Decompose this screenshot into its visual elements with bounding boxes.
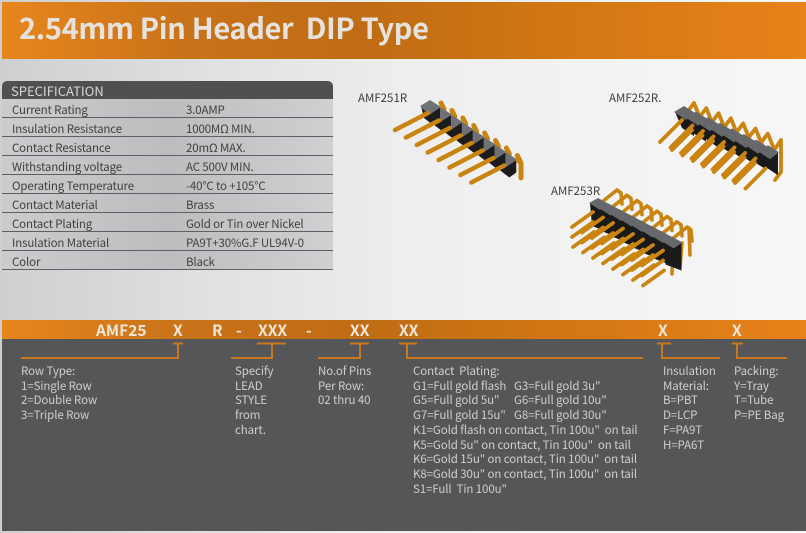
- code: insulation X: X: [658, 319, 668, 341]
- spec row: withstanding voltage: Withstanding voltage: [12, 159, 122, 175]
- label: AMF251R: AMF251R: [358, 90, 407, 106]
- code: R: R: [212, 319, 223, 341]
- spec row: contact resistance: 20mΩ MAX.: [186, 140, 246, 156]
- text: row type: Row Type: 1=Single Row 2=Double Row 3=Triple Row: [21, 363, 97, 423]
- spec row: current rating: Current Rating: [12, 102, 88, 118]
- code: dash: -: [306, 319, 312, 341]
- code: plating XX: XX: [399, 319, 418, 341]
- code: pins XX: XX: [350, 319, 369, 341]
- spec row: insulation material: [2, 232, 333, 251]
- spec row: color: [2, 251, 333, 270]
- spec row: insulation resistance: [2, 118, 333, 137]
- title: 2.54mm Pin Header DIP Type: [19, 6, 429, 48]
- table heading: [2, 81, 333, 99]
- spec row: contact resistance: Contact Resistance: [12, 140, 111, 156]
- bracket connectors: [21, 342, 787, 359]
- spec row: contact material: Brass: [186, 197, 214, 213]
- code: packing X: X: [732, 319, 742, 341]
- ordering code bar: [2, 320, 806, 339]
- spec row: insulation resistance: Insulation Resistance: [12, 121, 122, 137]
- spec row: current rating: 3.0AMP: [186, 102, 225, 118]
- table heading: SPECIFICATION: [11, 81, 104, 100]
- text: contact plating: G8=Full gold 30u": [514, 407, 607, 423]
- spec row: withstanding voltage: AC 500V MIN.: [186, 159, 254, 175]
- spec row: operating temperature: -40°C to +105°C: [186, 178, 266, 194]
- code: row type X: X: [173, 319, 183, 341]
- text: contact plating: G3=Full gold 3u": [514, 378, 600, 394]
- spec row: contact material: Contact Material: [12, 197, 98, 213]
- spec row: contact plating: [2, 213, 333, 232]
- code: dash: -: [236, 319, 242, 341]
- panel: ordering information: [2, 339, 806, 531]
- title banner: [2, 2, 806, 59]
- spec row: contact material: [2, 194, 333, 213]
- spec row: contact resistance: [2, 137, 333, 156]
- connector: AMF252R double row: [660, 103, 781, 188]
- spec row: insulation resistance: 1000MΩ MIN.: [186, 121, 255, 137]
- label: AMF252R: AMF252R.: [609, 90, 661, 106]
- spec row: current rating: [2, 99, 333, 118]
- connector: AMF251R single row: [395, 100, 521, 182]
- code: XXX: XXX: [258, 319, 287, 341]
- code: AMF25: AMF25: [96, 319, 147, 341]
- spec row: operating temperature: [2, 175, 333, 194]
- spec row: insulation material: PA9T+30%G.F UL94V-0: [186, 235, 304, 251]
- spec row: contact plating: Contact Plating: [12, 216, 92, 232]
- text: lead style: Specify LEAD STYLE from chart.: [235, 363, 273, 438]
- text: insulation material: Insulation Material: B=PBT D=LCP F=PA9T H=PA6T: [663, 363, 716, 453]
- connector: AMF253R triple row: [572, 190, 692, 286]
- spec row: color: Color: [12, 254, 40, 270]
- spec row: color: Black: [186, 254, 215, 270]
- spec row: withstanding voltage: [2, 156, 333, 175]
- label: AMF253R: AMF253R: [551, 183, 600, 199]
- text: contact plating: G6=Full gold 10u": [514, 392, 607, 408]
- spec row: operating temperature: Operating Temperature: [12, 178, 134, 194]
- spec row: insulation material: Insulation Material: [12, 235, 109, 251]
- text: pins per row: No.of Pins Per Row: 02 thru 40: [318, 363, 371, 408]
- text: contact plating: Contact Plating: G1=Full gold flash G5=Full gold 5u" G7=Full gold 15u" K1=Gold flash on contact, Tin 100u" on tail K5=Gold 5u" on contact, Tin 100u" on tail K6=Gold 15u" on contact, Tin 100u" on tail K8=Gold 30u" on contact, Tin 100u" on tail S1=Full Tin 100u": [413, 363, 638, 497]
- spec row: contact plating: Gold or Tin over Nickel: [186, 216, 303, 232]
- text: packing: Packing: Y=Tray T=Tube P=PE Bag: [734, 363, 784, 423]
